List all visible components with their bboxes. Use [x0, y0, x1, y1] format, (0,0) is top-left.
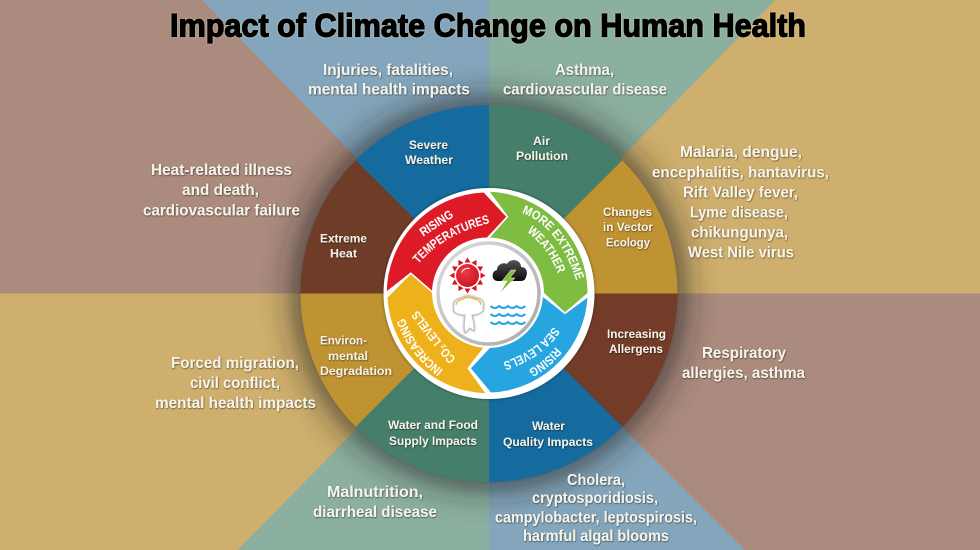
outer health impact labels — [143, 62, 829, 545]
text: extreme heat impacts — [143, 162, 300, 220]
text: air pollution impacts: Asthma, — [555, 62, 614, 79]
white ring — [384, 188, 594, 399]
icon: storm cloud — [493, 260, 527, 293]
label: water quality impacts: Water — [532, 419, 565, 433]
text: water quality impacts: campylobacter, leptospirosis, — [495, 510, 697, 526]
label: severe weather — [405, 138, 453, 167]
text: air pollution impacts: cardiovascular disease — [503, 82, 667, 98]
label: changes in vector ecology: Changes — [603, 205, 652, 219]
text: water quality impacts: harmful algal blooms — [523, 528, 669, 545]
arrow: rising sea levels: SEA LEVELS — [504, 328, 560, 370]
label: changes in vector ecology: in Vector — [603, 220, 653, 234]
text: food supply impacts: Malnutrition, — [327, 484, 423, 501]
arrow: increasing CO2 levels: INCREASING — [397, 318, 443, 376]
arrow: rising sea levels — [471, 296, 588, 392]
text: allergen impacts — [682, 345, 805, 382]
arrow: more extreme weather: MORE EXTREME — [522, 205, 584, 280]
text: extreme heat impacts: cardiovascular failure — [143, 202, 300, 220]
label: changes in vector ecology — [603, 205, 653, 250]
center circle — [434, 239, 543, 348]
text: water quality impacts: cryptosporidiosis, — [532, 490, 658, 507]
text: severe weather impacts: Injuries, fatalities, — [323, 62, 453, 79]
label: increasing allergens: Increasing — [607, 327, 666, 341]
label: environmental degradation — [320, 334, 392, 378]
arrow: more extreme weather: WEATHER — [528, 225, 565, 274]
text: vector ecology impacts: West Nile virus — [688, 244, 794, 262]
text: allergen impacts: allergies, asthma — [682, 365, 805, 382]
label: air pollution: Air — [533, 134, 550, 148]
text: vector ecology impacts: Lyme disease, — [690, 204, 788, 222]
arrow: more extreme weather — [490, 192, 588, 312]
label: water and food supply impacts — [388, 418, 478, 448]
label: air pollution: Pollution — [516, 149, 568, 163]
label: extreme heat: Heat — [330, 246, 357, 260]
label: changes in vector ecology: Ecology — [606, 236, 650, 250]
label: water quality impacts — [503, 419, 593, 449]
text: food supply impacts — [313, 484, 437, 521]
text: allergen impacts: Respiratory — [702, 345, 786, 362]
icon: mushroom cloud — [454, 296, 483, 333]
text: water quality impacts: Cholera, — [567, 472, 625, 489]
label: air pollution — [516, 134, 568, 163]
text: severe weather impacts — [308, 62, 470, 98]
text: vector ecology impacts: Rift Valley fever, — [683, 184, 798, 202]
title: Impact of Climate Change on Human Health — [170, 8, 806, 44]
icon: sea waves — [490, 306, 525, 324]
text: extreme heat impacts: Heat-related illness — [151, 162, 292, 179]
arrow: rising temperatures: RISING — [419, 210, 453, 236]
label: extreme heat — [320, 232, 367, 260]
text: degradation impacts — [155, 355, 316, 412]
arrow: increasing CO2 levels — [388, 272, 485, 394]
text: food supply impacts: diarrheal disease — [313, 504, 437, 521]
label: severe weather: Weather — [405, 153, 453, 167]
label: extreme heat: Extreme — [320, 232, 367, 246]
icon: sun — [450, 258, 486, 294]
text: degradation impacts: Forced migration, — [171, 355, 299, 372]
text: degradation impacts: mental health impacts — [155, 395, 316, 412]
label: increasing allergens: Allergens — [609, 342, 663, 356]
label: water quality impacts: Quality Impacts — [503, 435, 593, 449]
label: water and food supply impacts: Water and Food — [388, 418, 478, 432]
label: environmental degradation: mental — [328, 349, 368, 363]
text: vector ecology impacts: chikungunya, — [691, 224, 788, 242]
arrow: rising sea levels: RISING — [530, 347, 562, 376]
wheel shadow — [295, 100, 683, 488]
label: increasing allergens — [607, 327, 666, 356]
arrow: increasing CO2 levels: CO₂ LEVELS — [412, 311, 454, 363]
label: environmental degradation: Environ- — [320, 334, 367, 348]
text: vector ecology impacts: Malaria, dengue, — [680, 144, 802, 161]
text: severe weather impacts: mental health impacts — [308, 82, 470, 98]
text: degradation impacts: civil conflict, — [190, 375, 280, 392]
text: vector ecology impacts — [652, 144, 829, 262]
sector labels — [320, 134, 666, 449]
text: vector ecology impacts: encephalitis, hantavirus, — [652, 164, 829, 182]
label: severe weather: Severe — [409, 138, 448, 152]
text: extreme heat impacts: and death, — [182, 182, 259, 199]
arrow: rising temperatures: TEMPERATURES — [412, 215, 489, 262]
arrow: rising temperatures — [386, 192, 506, 291]
outer sector wheel — [300, 105, 678, 482]
text: water quality impacts — [495, 472, 697, 545]
label: water and food supply impacts: Supply Impacts — [389, 434, 477, 448]
text: air pollution impacts — [503, 62, 667, 98]
label: environmental degradation: Degradation — [320, 364, 392, 378]
